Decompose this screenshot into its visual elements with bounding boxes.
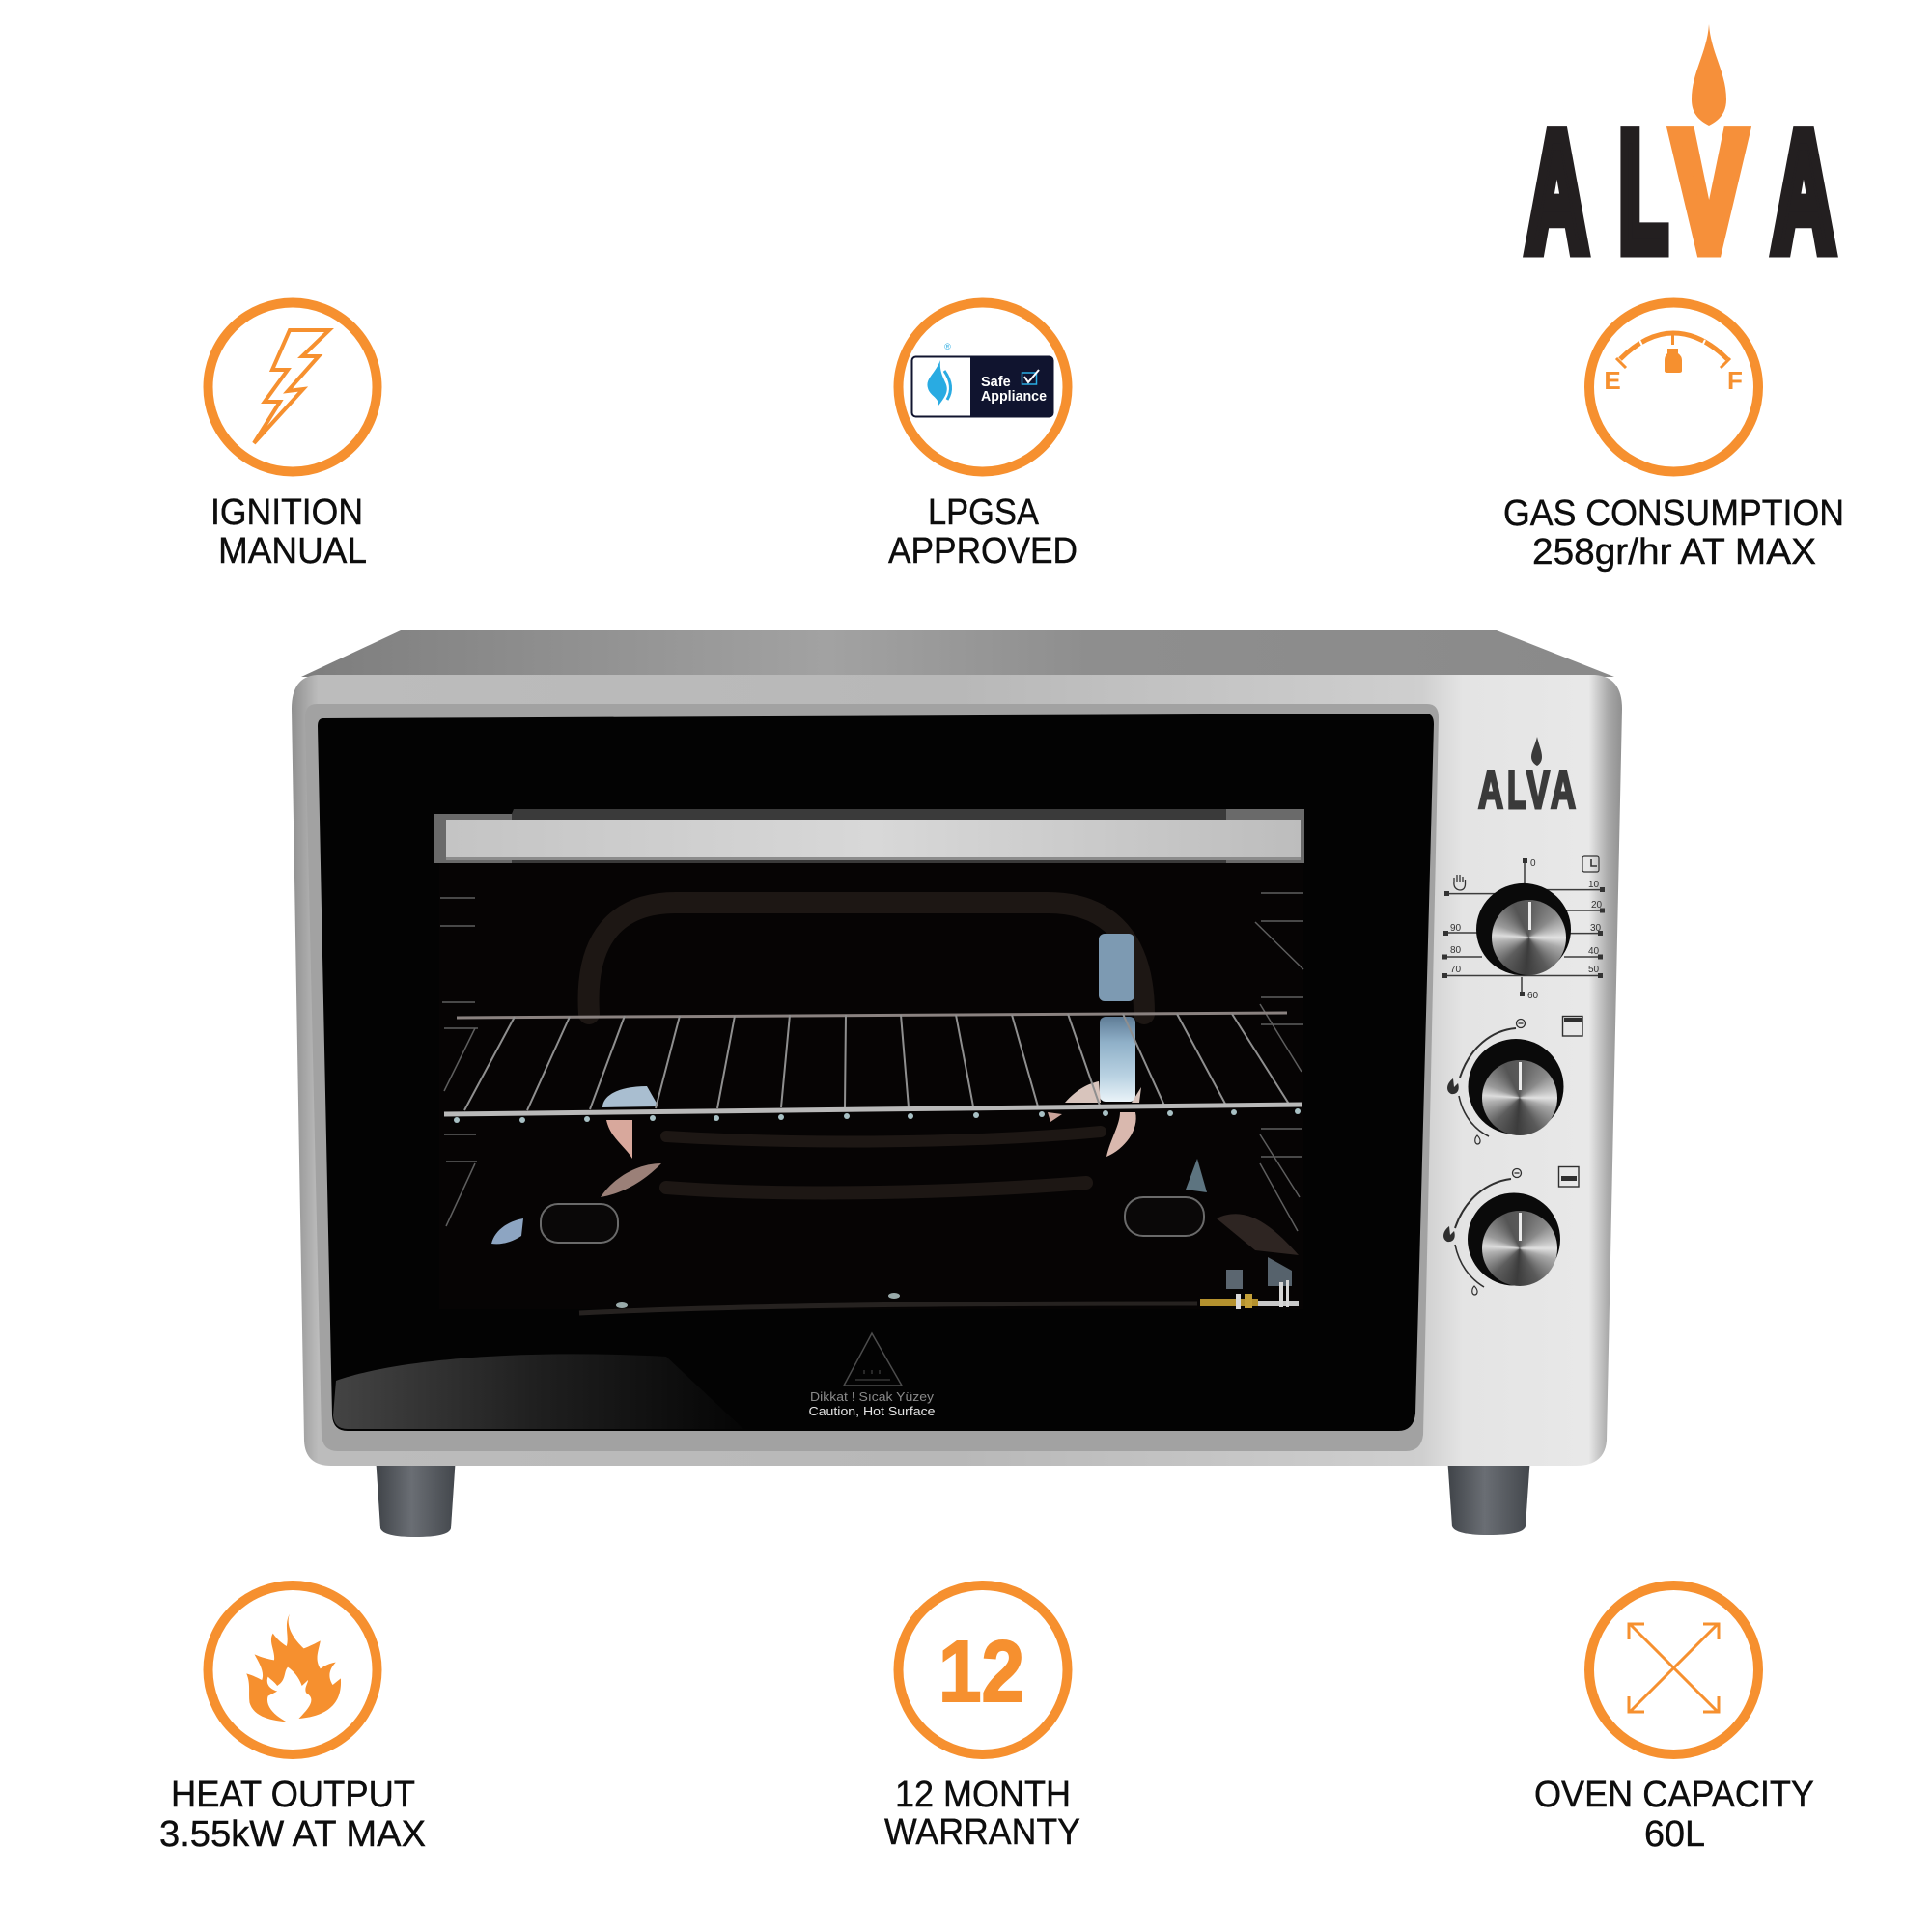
timer knob bbox=[1476, 883, 1571, 975]
oven product illustration bbox=[292, 630, 1622, 1537]
icon: gas gauge in ring bbox=[1589, 303, 1758, 471]
timer scale: 30 bbox=[1590, 923, 1602, 934]
label: oven capacity bbox=[1534, 1775, 1814, 1855]
panel logo: A bbox=[1478, 759, 1503, 820]
feature: warranty bbox=[884, 1585, 1080, 1853]
panel logo bbox=[1478, 737, 1576, 820]
feature: oven capacity bbox=[1534, 1585, 1814, 1855]
icon: flame in ring bbox=[209, 1585, 377, 1754]
icon: lightning bolt in ring bbox=[209, 303, 377, 471]
door glass bbox=[318, 714, 1434, 1431]
icon: safe appliance badge in ring: Safe bbox=[981, 375, 1011, 390]
timer scale: 90 bbox=[1450, 923, 1462, 934]
label: warranty: WARRANTY bbox=[884, 1812, 1080, 1853]
logo wordmark: V bbox=[1673, 99, 1745, 285]
rack wires bbox=[464, 1014, 1290, 1110]
bottom heat knob scale bbox=[1443, 1166, 1579, 1295]
icon: 12 in ring: 12 bbox=[938, 1624, 1024, 1721]
label: heat output bbox=[159, 1775, 426, 1855]
icon: timer clock bbox=[1582, 856, 1599, 872]
feature: ignition manual bbox=[209, 303, 377, 572]
label: oven capacity: OVEN CAPACITY bbox=[1534, 1775, 1814, 1815]
timer scale: 60 bbox=[1527, 991, 1539, 1001]
oven body bbox=[292, 675, 1622, 1466]
label: ignition manual: IGNITION bbox=[210, 492, 363, 533]
logo flame bbox=[1692, 24, 1726, 126]
panel logo: L bbox=[1507, 759, 1526, 820]
reflection: window light bbox=[491, 934, 1299, 1255]
door handle bbox=[434, 809, 1304, 863]
label: oven capacity: 60L bbox=[1644, 1814, 1705, 1855]
label: ignition manual bbox=[210, 492, 367, 572]
top heat knob scale bbox=[1447, 1016, 1582, 1144]
logo wordmark: L bbox=[1619, 99, 1667, 285]
icon: manual hand bbox=[1454, 875, 1466, 890]
label: LPGSA approved: LPGSA bbox=[928, 492, 1040, 533]
bottom heat knob bbox=[1468, 1193, 1560, 1286]
oven top surface bbox=[301, 630, 1614, 677]
icon: gas gauge in ring: F bbox=[1727, 366, 1743, 395]
icon: 12 in ring bbox=[898, 1585, 1068, 1754]
timer scale: 50 bbox=[1588, 965, 1600, 975]
logo wordmark: A bbox=[1773, 99, 1834, 285]
label: LPGSA approved bbox=[888, 492, 1078, 572]
control panel bbox=[1442, 737, 1605, 1295]
feature: heat output bbox=[159, 1585, 426, 1855]
brand logo bbox=[1526, 24, 1834, 285]
timer scale: 80 bbox=[1450, 945, 1462, 956]
label: gas consumption: 258gr/hr AT MAX bbox=[1532, 532, 1816, 573]
label: warranty: 12 MONTH bbox=[895, 1775, 1071, 1815]
timer scale: 40 bbox=[1588, 946, 1600, 957]
timer scale: 0 bbox=[1530, 858, 1536, 869]
icon: safe appliance badge in ring: Appliance bbox=[981, 389, 1047, 405]
feature: gas consumption bbox=[1503, 303, 1844, 573]
label: gas consumption: GAS CONSUMPTION bbox=[1503, 493, 1844, 534]
icon: expand arrows in ring bbox=[1589, 1585, 1758, 1754]
rack studs bbox=[454, 1108, 1301, 1123]
logo wordmark bbox=[1526, 99, 1834, 285]
oven feet bbox=[376, 1456, 1530, 1537]
side rack rungs bbox=[440, 893, 1303, 1231]
door warning label bbox=[809, 1333, 936, 1418]
burner floor and gas fitting bbox=[579, 1257, 1299, 1313]
timer scale: 70 bbox=[1450, 965, 1462, 975]
door bezel bbox=[305, 704, 1439, 1451]
label: ignition manual: MANUAL bbox=[218, 531, 367, 572]
icon: safe appliance badge in ring: ® bbox=[944, 342, 951, 351]
timer scale bbox=[1442, 856, 1605, 1001]
feature: LPGSA approved bbox=[888, 303, 1078, 572]
panel logo: A bbox=[1551, 759, 1576, 820]
oven window interior bbox=[439, 859, 1303, 1313]
logo wordmark: A bbox=[1526, 99, 1587, 285]
door warning label: Dikkat ! Sıcak Yüzey bbox=[810, 1390, 935, 1404]
rear rack rail bbox=[457, 1013, 1287, 1018]
door warning label: Caution, Hot Surface bbox=[809, 1405, 936, 1418]
top heat knob bbox=[1468, 1039, 1564, 1135]
label: gas consumption bbox=[1503, 493, 1844, 573]
label: LPGSA approved: APPROVED bbox=[888, 531, 1078, 572]
panel logo: V bbox=[1526, 759, 1550, 820]
front rack rail bbox=[444, 1105, 1302, 1114]
reflection: door handles bbox=[541, 1197, 1204, 1243]
timer scale: 10 bbox=[1588, 880, 1600, 890]
icon: gas gauge in ring: E bbox=[1604, 366, 1621, 395]
reflected heating element bbox=[589, 903, 1144, 1192]
icon: safe appliance badge in ring bbox=[898, 303, 1068, 471]
label: warranty bbox=[884, 1775, 1080, 1853]
label: heat output: HEAT OUTPUT bbox=[171, 1775, 415, 1815]
label: heat output: 3.55kW AT MAX bbox=[159, 1814, 426, 1855]
timer scale: 20 bbox=[1591, 900, 1603, 910]
